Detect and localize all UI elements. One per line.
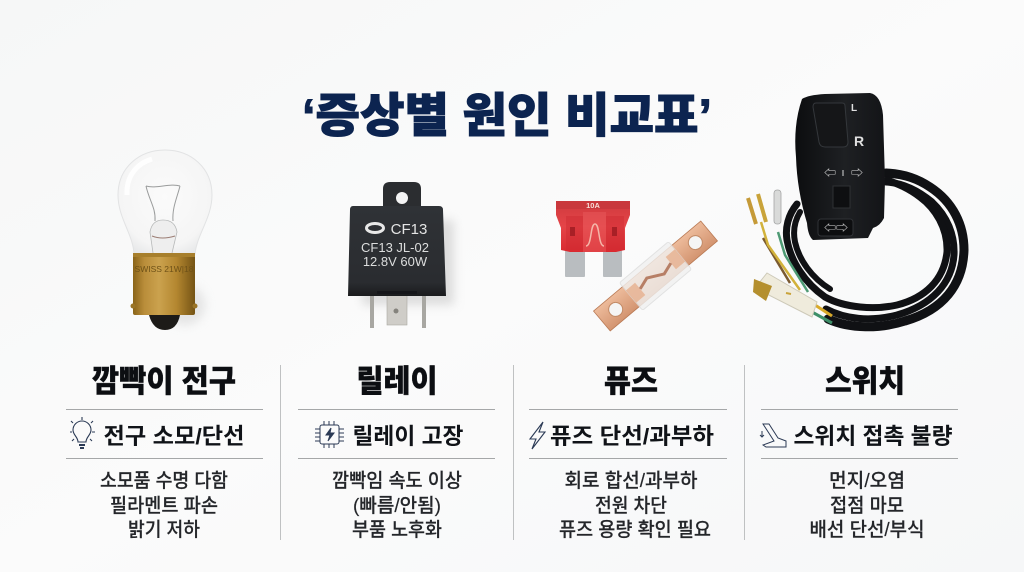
- icon: handlebar switch with wiring: ⇦: [824, 166, 836, 180]
- icon: lightning bolt: [530, 422, 545, 449]
- causes: bulb: [100, 470, 228, 541]
- icon: turn signal bulb: [118, 150, 212, 330]
- causes: bulb: 필라멘트 파손: [110, 495, 218, 517]
- icon: handlebar switch with wiring: ⇨: [851, 166, 863, 180]
- icon: turn signal bulb: SWISS 21W|18: [135, 264, 194, 274]
- causes: bulb: 밝기 저하: [128, 519, 200, 541]
- icon: relay: [348, 182, 454, 328]
- icon: relay: CF13 JL-02: [361, 240, 429, 255]
- panel: switch: [760, 364, 958, 541]
- icon: handlebar switch with wiring: [748, 93, 964, 327]
- heading: bulb: 깜빡이 전구: [92, 364, 236, 399]
- causes: relay: 깜빡임 속도 이상: [332, 470, 462, 492]
- causes: fuse: 전원 차단: [595, 495, 667, 517]
- icon: handlebar switch with wiring: ⇦⇨: [824, 221, 848, 235]
- icon: relay: 12.8V 60W: [363, 254, 428, 269]
- causes: switch: [810, 470, 924, 541]
- heading: fuse: 퓨즈: [604, 364, 658, 399]
- causes: bulb: 소모품 수명 다함: [100, 470, 228, 492]
- causes: relay: [332, 470, 462, 541]
- icon: handlebar switch with wiring: L: [851, 103, 857, 114]
- panel: relay: [298, 364, 495, 541]
- icon: red blade fuse: [556, 201, 630, 277]
- causes: relay: (빠름/안됨): [353, 495, 441, 517]
- causes: switch: 먼지/오염: [829, 470, 905, 492]
- dividers: [280, 365, 744, 540]
- icon: handlebar switch with wiring: R: [854, 133, 864, 149]
- icon: switch lever: [760, 424, 786, 447]
- subheading: relay: 릴레이 고장: [352, 424, 464, 449]
- icon: red blade fuse: 10A: [586, 201, 600, 210]
- icon: relay: CF13: [391, 221, 427, 238]
- icon: copper bar fuse: [590, 217, 721, 335]
- subheading: fuse: 퓨즈 단선/과부하: [550, 424, 714, 449]
- causes: fuse: 퓨즈 용량 확인 필요: [559, 519, 711, 541]
- heading: relay: 릴레이: [356, 364, 438, 399]
- subheading: switch: 스위치 접촉 불량: [794, 424, 953, 449]
- causes: switch: 접점 마모: [830, 495, 904, 517]
- heading: switch: 스위치: [825, 364, 905, 399]
- causes: relay: 부품 노후화: [352, 519, 442, 541]
- title: ‘증상별 원인 비교표’: [302, 89, 712, 142]
- panel: turn signal bulb: [66, 364, 263, 541]
- subheading: bulb: 전구 소모/단선: [104, 424, 244, 449]
- icon: chip with bolt: [315, 421, 344, 448]
- causes: fuse: [559, 470, 711, 541]
- panel: fuse: [529, 364, 727, 541]
- causes: switch: 배선 단선/부식: [810, 519, 924, 541]
- causes: fuse: 회로 합선/과부하: [564, 470, 698, 492]
- icon: light bulb: [70, 417, 95, 448]
